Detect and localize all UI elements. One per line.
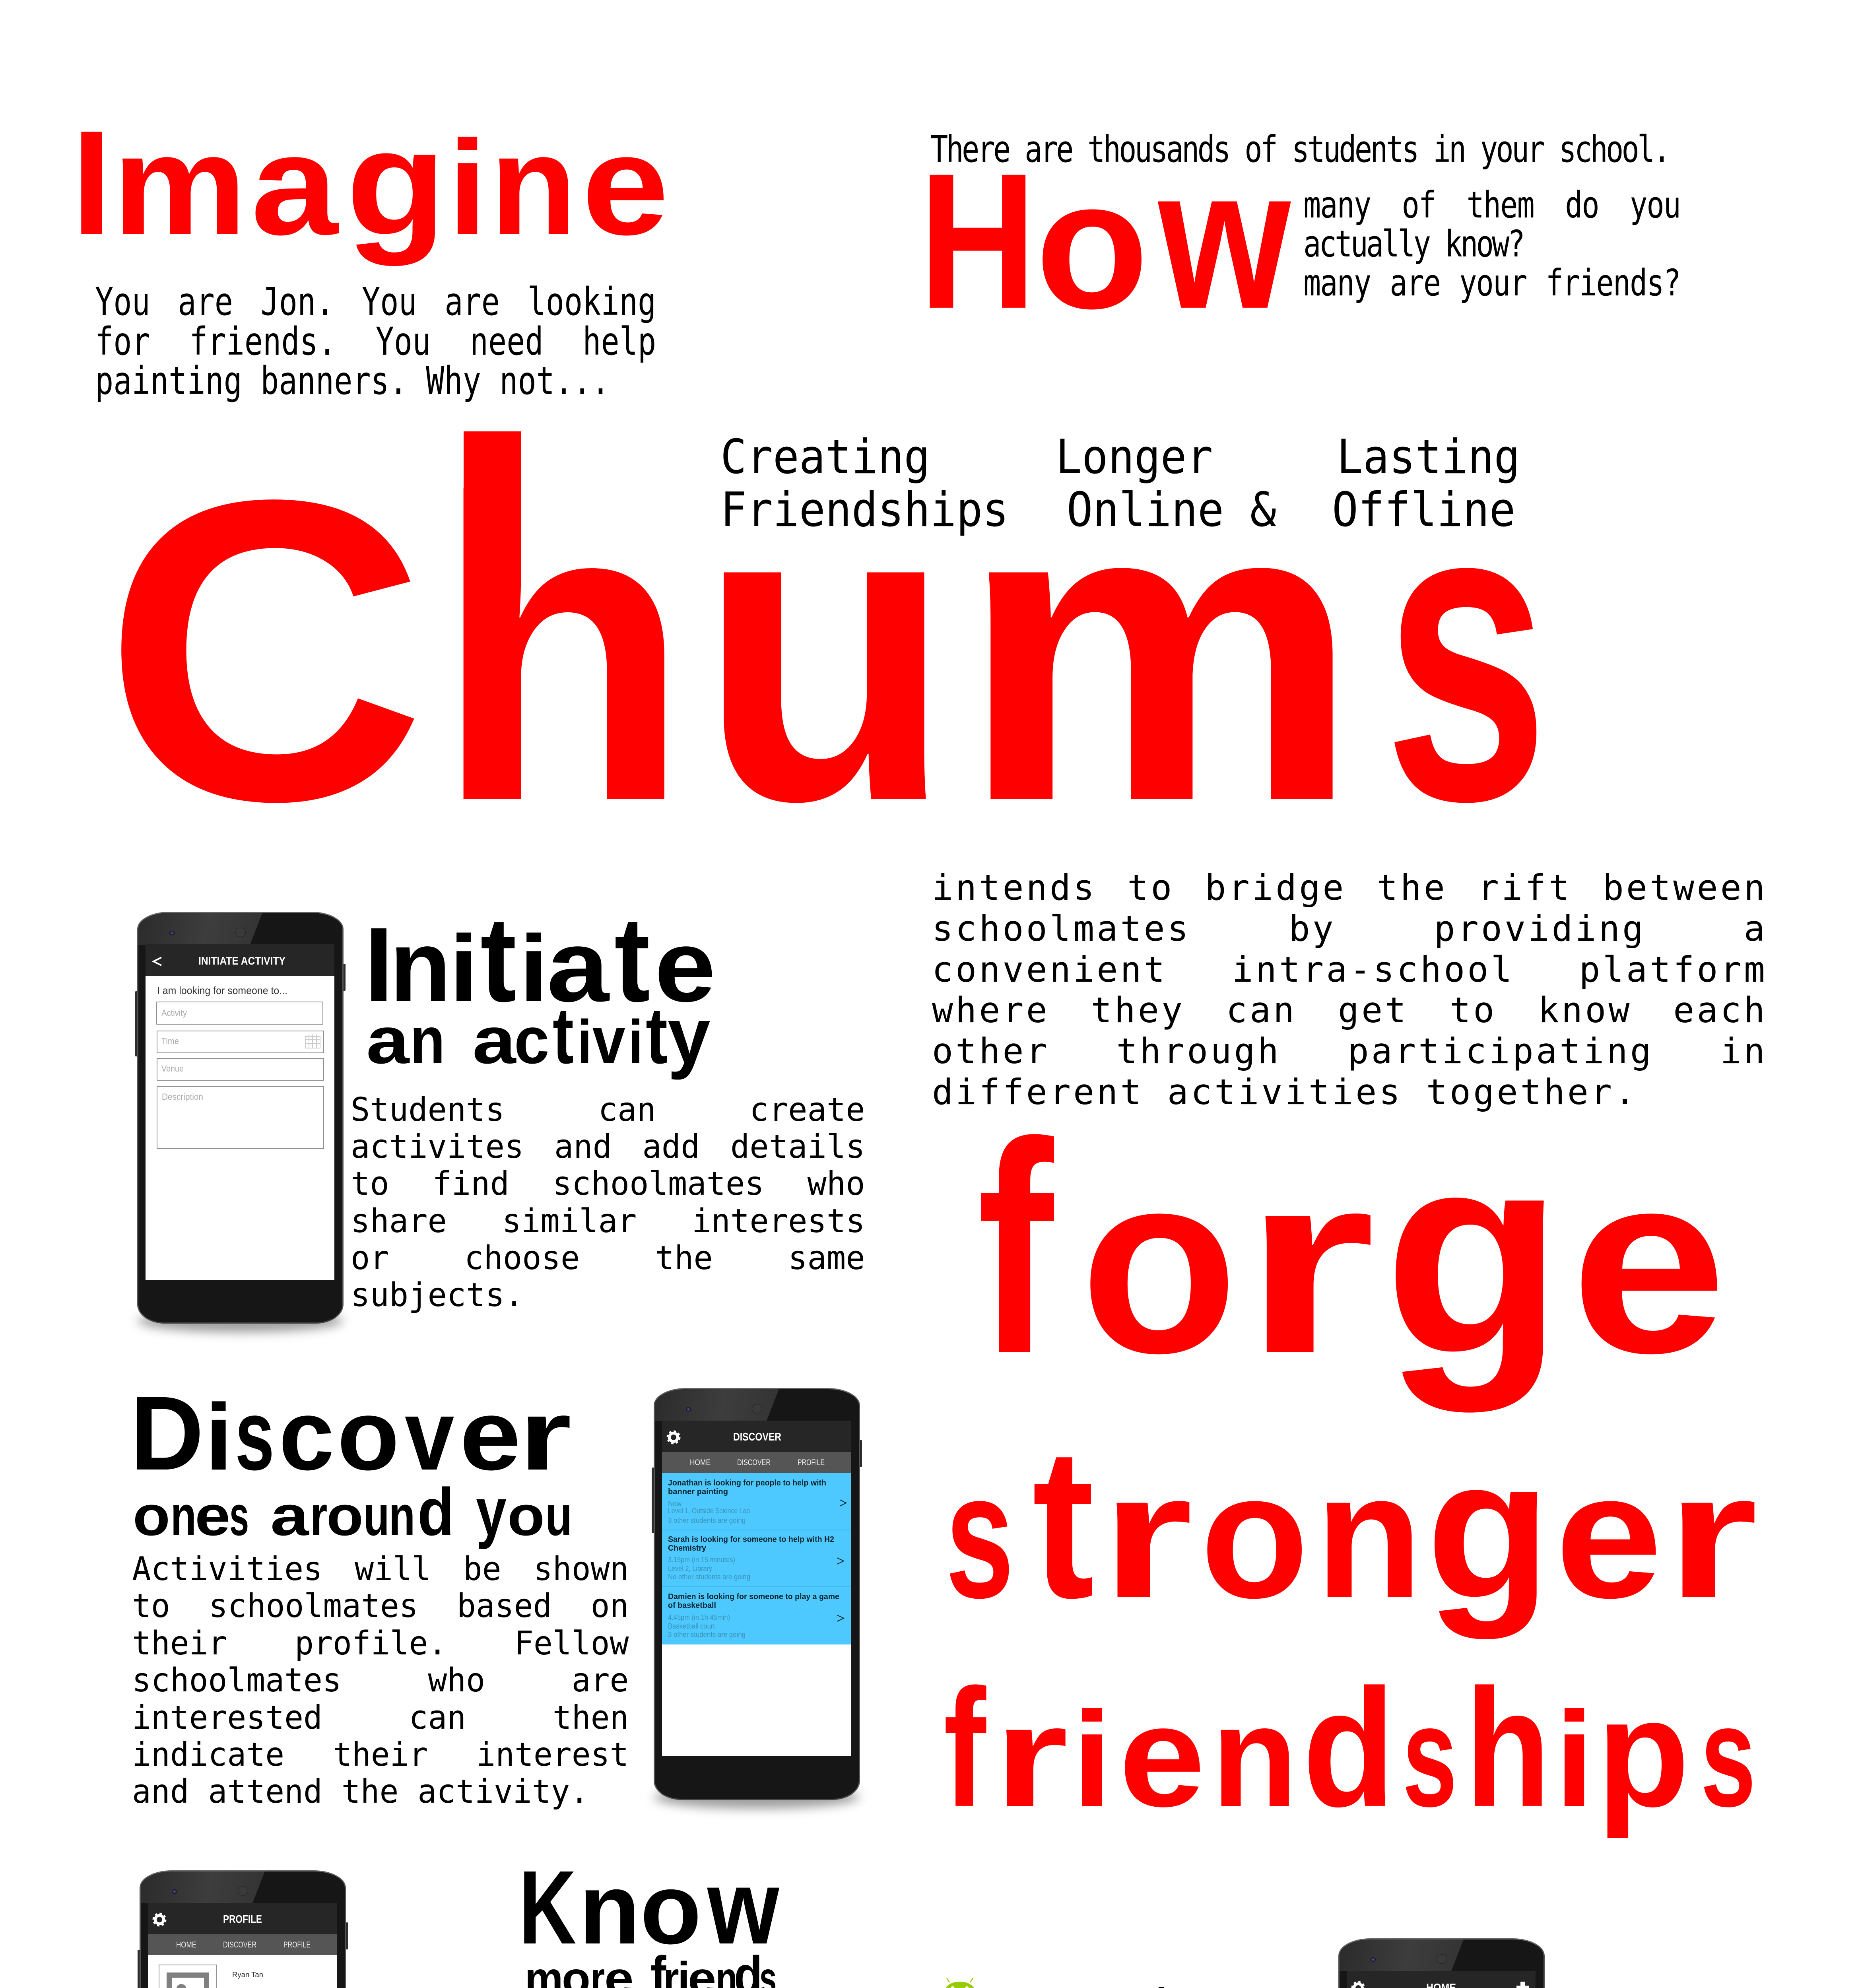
activity: basketball: of basketball (668, 1601, 716, 1610)
heading: friendships: e (1119, 1675, 1205, 1837)
subheading: ones around you: u (545, 1484, 573, 1547)
heading: Know (523, 1871, 781, 1946)
subheading: an activity: a (366, 1004, 409, 1077)
heading: Discover: e (460, 1379, 521, 1491)
app header: profile: PROFILE (223, 1913, 262, 1925)
tab bar: HOME (690, 1458, 711, 1467)
app header: home (1347, 1971, 1536, 1988)
heading: Discover: D (130, 1375, 204, 1492)
subheading: ones around you: n (389, 1484, 415, 1547)
subheading: ones around you (133, 1485, 573, 1557)
heading: Imagine: a (251, 105, 338, 265)
heading: friendships: i (1555, 1683, 1594, 1835)
heading: Discover: r (519, 1379, 571, 1491)
heading: forge: e (1571, 1119, 1727, 1406)
activity: basketball: Damien is looking for someone to play a game (668, 1592, 839, 1601)
field placeholders: Time (161, 1036, 179, 1046)
text: imagine intro: You are Jon. You are looking (95, 280, 656, 324)
heading: stronger: r (1666, 1436, 1758, 1635)
app header: discover: DISCOVER (733, 1431, 781, 1443)
activity list (662, 1473, 851, 1644)
subheading: an activity: i (578, 1008, 592, 1077)
heading: Discover: c (279, 1379, 334, 1491)
icon: android (935, 1978, 984, 1988)
heading: Chums: s (1384, 411, 1549, 890)
heading: Initiate: I (364, 906, 393, 1024)
heading: stronger: s (946, 1436, 1014, 1635)
app header: profile (148, 1903, 337, 1934)
activity: chemistry: Sarah is looking for someone to help with H2 (668, 1535, 834, 1544)
subheading: an activity: t (553, 991, 574, 1081)
subheading: ones around you: u (363, 1484, 389, 1547)
heading: Imagine: n (490, 105, 577, 265)
tab bar (148, 1934, 337, 1955)
activity: banner painting: Now (668, 1500, 682, 1508)
text: initiate description: Students can create (351, 1091, 865, 1129)
subheading: an activity: n (410, 1004, 445, 1077)
text: initiate description (351, 1091, 865, 1314)
heading: Discover (135, 1396, 575, 1475)
heading: friendships: h (1465, 1654, 1551, 1841)
tagline: longer online: Online & (1067, 483, 1276, 538)
heading: How: w (1158, 126, 1291, 350)
activity: banner painting: Jonathan is looking for people to help with (668, 1479, 826, 1487)
text: thousands of students: There are thousands of students in your school. (930, 128, 1669, 171)
tab bar: HOME (176, 1940, 196, 1949)
subheading: an activity: t (646, 991, 668, 1081)
activity: banner painting: Level 1, Outside Science Lab (668, 1507, 750, 1515)
heading: forge: r (1243, 1119, 1376, 1406)
subheading: ones around you: s (229, 1484, 249, 1547)
heading: Imagine: e (582, 105, 669, 265)
heading: Know: n (579, 1852, 641, 1965)
tagline: longer online: Longer (1056, 430, 1213, 485)
heading: Chums: C (103, 411, 426, 890)
heading: Initiate: t (480, 892, 516, 1027)
text: discover description: their profile. Fellow (132, 1625, 629, 1662)
heading: forge (978, 1131, 1720, 1429)
activity: banner painting: 3 other students are going (668, 1516, 746, 1524)
subheading: an activity: i (628, 1008, 643, 1077)
activity: banner painting: banner painting (668, 1487, 728, 1496)
tab bar (662, 1452, 851, 1473)
heading: friendships: r (994, 1675, 1068, 1837)
text: chums mission: different activities together. (932, 1072, 1638, 1112)
text: chums mission (932, 868, 1767, 1113)
student name and school: Ryan Tan (232, 1971, 263, 1979)
form prompt: I am looking for someone to... (157, 984, 287, 996)
heading: Chums (119, 429, 1543, 805)
text: discover description: interested can then (132, 1699, 629, 1737)
subheading: ones around you: n (171, 1484, 196, 1547)
text: chums mission: where they can get to know each (932, 990, 1767, 1031)
tab bar: DISCOVER (223, 1940, 256, 1949)
app header: initiate activity: INITIATE ACTIVITY (198, 955, 285, 967)
heading: stronger: t (1032, 1404, 1094, 1643)
heading: forge: g (1384, 1093, 1563, 1413)
text: chums mission: other through participating in (932, 1031, 1767, 1072)
field placeholders: Venue (161, 1064, 184, 1074)
activity: basketball: 4.45pm (in 1h 45min) (668, 1613, 730, 1621)
text: how many question (1303, 186, 1680, 303)
text: imagine intro: painting banners. Why not... (95, 359, 610, 403)
text: discover description: indicate their interest (132, 1736, 629, 1774)
heading: friendships: f (944, 1654, 986, 1841)
subheading: more friends (525, 1954, 777, 1988)
tagline: longer online (1056, 431, 1276, 537)
text: imagine intro: for friends. You need help (95, 319, 656, 363)
app header: discover (662, 1421, 851, 1452)
heading: Initiate: a (547, 909, 609, 1023)
heading: stronger (948, 1447, 1759, 1652)
subheading: an activity: v (592, 1004, 625, 1077)
subheading: an activity: a (472, 1004, 516, 1077)
text: how many question: many of them do you (1303, 184, 1680, 226)
profile photo placeholder (159, 1965, 217, 1988)
text: chums mission: convenient intra-school platform (932, 949, 1767, 990)
subheading: ones around you: y (476, 1474, 507, 1550)
heading: Discover: i (205, 1384, 233, 1490)
text: discover description: to schoolmates based on (132, 1587, 629, 1625)
text: how many question: many are your friends? (1303, 262, 1680, 304)
heading: Know: w (707, 1848, 779, 1966)
tagline: creating friendships: Friendships (720, 483, 1009, 538)
heading: Initiate: t (614, 892, 650, 1027)
heading: friendships: s (1701, 1675, 1756, 1837)
heading: Chums: u (698, 411, 953, 890)
text: initiate description: or choose the same (351, 1239, 865, 1277)
activity: chemistry: No other students are going (668, 1573, 750, 1581)
heading: How: o (1035, 143, 1149, 347)
phone: home screen (1338, 1938, 1545, 1988)
heading: stronger: n (1315, 1436, 1423, 1635)
heading: friendships: d (1303, 1654, 1395, 1841)
heading: friendships (942, 1682, 1755, 1845)
field placeholders (161, 1008, 203, 1102)
subheading: an activity: y (668, 992, 710, 1080)
phone: profile screen (140, 1870, 346, 1988)
heading: Imagine: i (448, 113, 487, 263)
field placeholders: Description (162, 1092, 203, 1102)
tagline: lasting offline (1332, 431, 1520, 537)
text: discover description (132, 1551, 629, 1811)
heading: Initiate: i (449, 916, 478, 1021)
heading: stronger: r (1101, 1436, 1193, 1635)
heading: Discover: v (405, 1379, 454, 1491)
activity: basketball: 3 other students are going (668, 1631, 746, 1639)
heading: friendships: s (1402, 1675, 1457, 1837)
heading: Imagine (80, 131, 668, 278)
subheading: ones around you: d (417, 1474, 454, 1549)
activity: chemistry: 3.15pm (in 15 minutes) (668, 1556, 735, 1564)
activity: chemistry (668, 1535, 844, 1581)
text: chums mission: intends to bridge the rift between (932, 867, 1767, 908)
phone: discover screen (654, 1388, 860, 1800)
text: imagine intro (95, 282, 656, 401)
subheading: ones around you: r (310, 1484, 327, 1547)
heading: Discover: s (235, 1379, 275, 1491)
subheading: an activity: c (514, 1004, 549, 1077)
heading: friendships: p (1597, 1666, 1689, 1839)
tab bar: DISCOVER (737, 1458, 771, 1467)
text: how many question: actually know? (1303, 223, 1523, 265)
form fields (157, 1002, 324, 1149)
subheading: ones around you: o (326, 1484, 363, 1547)
heading: forge: f (977, 1080, 1054, 1415)
heading: Chums: m (959, 411, 1361, 890)
field placeholders: Activity (161, 1008, 187, 1018)
text: initiate description: share similar interests (351, 1202, 865, 1240)
text: discover description: and attend the activity. (132, 1773, 589, 1811)
heading: Discover: o (337, 1379, 400, 1491)
heading: How: H (919, 133, 1037, 349)
app header: initiate activity (146, 944, 334, 976)
heading: Imagine: m (113, 105, 247, 265)
activity: chemistry: Level 2, Library (668, 1565, 712, 1573)
phone: initiate activity screen (137, 912, 344, 1324)
activity: chemistry: Chemistry (668, 1544, 707, 1553)
subheading: an activity (368, 1006, 714, 1087)
text: initiate description: subjects. (351, 1276, 524, 1314)
heading: Initiate (370, 914, 716, 1004)
heading: Initiate: i (519, 916, 548, 1021)
tagline: creating friendships: Creating (720, 430, 930, 485)
tagline: lasting offline: Lasting (1337, 430, 1520, 485)
heading: Chums: h (434, 411, 690, 890)
heading: Imagine: g (346, 99, 446, 266)
heading: stronger: e (1555, 1436, 1662, 1635)
heading: forge: o (1080, 1119, 1238, 1406)
heading: Know: K (519, 1849, 577, 1966)
subheading: ones around you: a (270, 1484, 309, 1547)
subheading: ones around you: o (133, 1484, 170, 1547)
activity: banner painting (668, 1479, 846, 1524)
text: initiate description: activites and add details (351, 1128, 865, 1166)
text: initiate description: to find schoolmates who (351, 1165, 865, 1203)
heading: stronger: g (1426, 1418, 1551, 1640)
tab bar: PROFILE (283, 1940, 311, 1949)
tagline: creating friendships (720, 431, 1009, 537)
text: discover description: schoolmates who are (132, 1662, 629, 1699)
subheading: ones around you: o (507, 1484, 544, 1547)
tab bar: PROFILE (798, 1458, 825, 1467)
heading: friendships: i (1072, 1683, 1112, 1835)
heading: Initiate: n (390, 909, 451, 1023)
text: discover description: Activities will be shown (132, 1550, 629, 1588)
heading: Initiate: e (654, 909, 716, 1023)
tagline: lasting offline: Offline (1332, 483, 1515, 538)
heading: friendships: n (1212, 1675, 1298, 1837)
subheading: ones around you: e (195, 1484, 231, 1547)
heading: How (928, 173, 1292, 316)
icon: calendar (305, 1035, 320, 1048)
text: chums mission: schoolmates by providing a (932, 908, 1767, 949)
activity: basketball (668, 1592, 844, 1639)
heading: Imagine: I (72, 100, 112, 266)
heading: Know: o (640, 1852, 702, 1965)
heading: stronger: o (1200, 1436, 1309, 1635)
activity: basketball: Basketball court (668, 1622, 715, 1630)
